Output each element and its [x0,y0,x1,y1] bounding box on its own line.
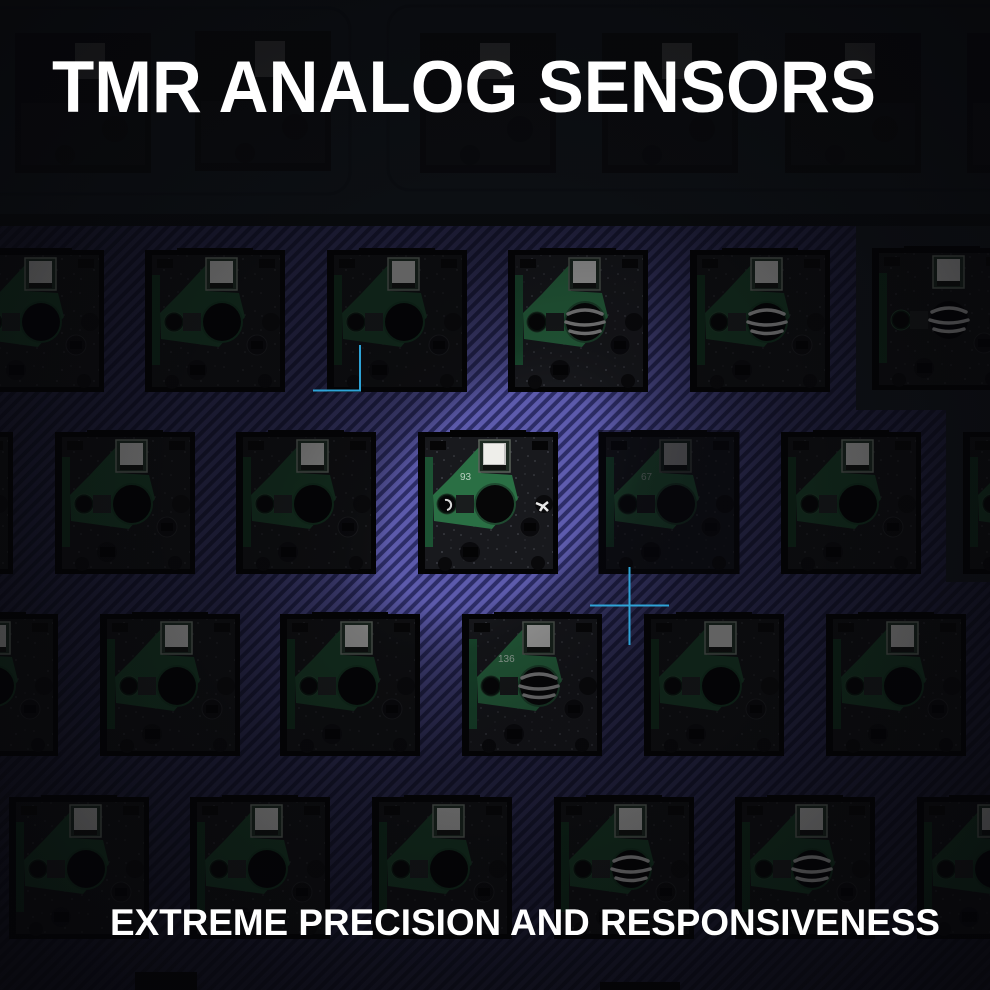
crosshair marker: plus [590,567,669,645]
crosshair marker: corner [313,345,360,390]
subtitle: EXTREME PRECISION AND RESPONSIVENESS [110,902,940,943]
switch row 2 [0,430,990,574]
highlighted switch [418,430,558,574]
switch row 3 [0,612,966,756]
dark housing frame regions [0,0,990,582]
top keycap frames [0,6,990,194]
shaded neighbouring switch [598,430,740,574]
title: TMR ANALOG SENSORS [52,47,876,128]
top row of dim switches [15,31,990,173]
highlighted switch: 93 [460,472,472,483]
switch row 3: 136 [498,654,515,665]
switch row 4 [9,795,990,939]
shaded neighbouring switch: 67 [641,472,653,483]
partial switches at bottom edge [135,972,680,990]
switch row 1 [0,246,990,392]
